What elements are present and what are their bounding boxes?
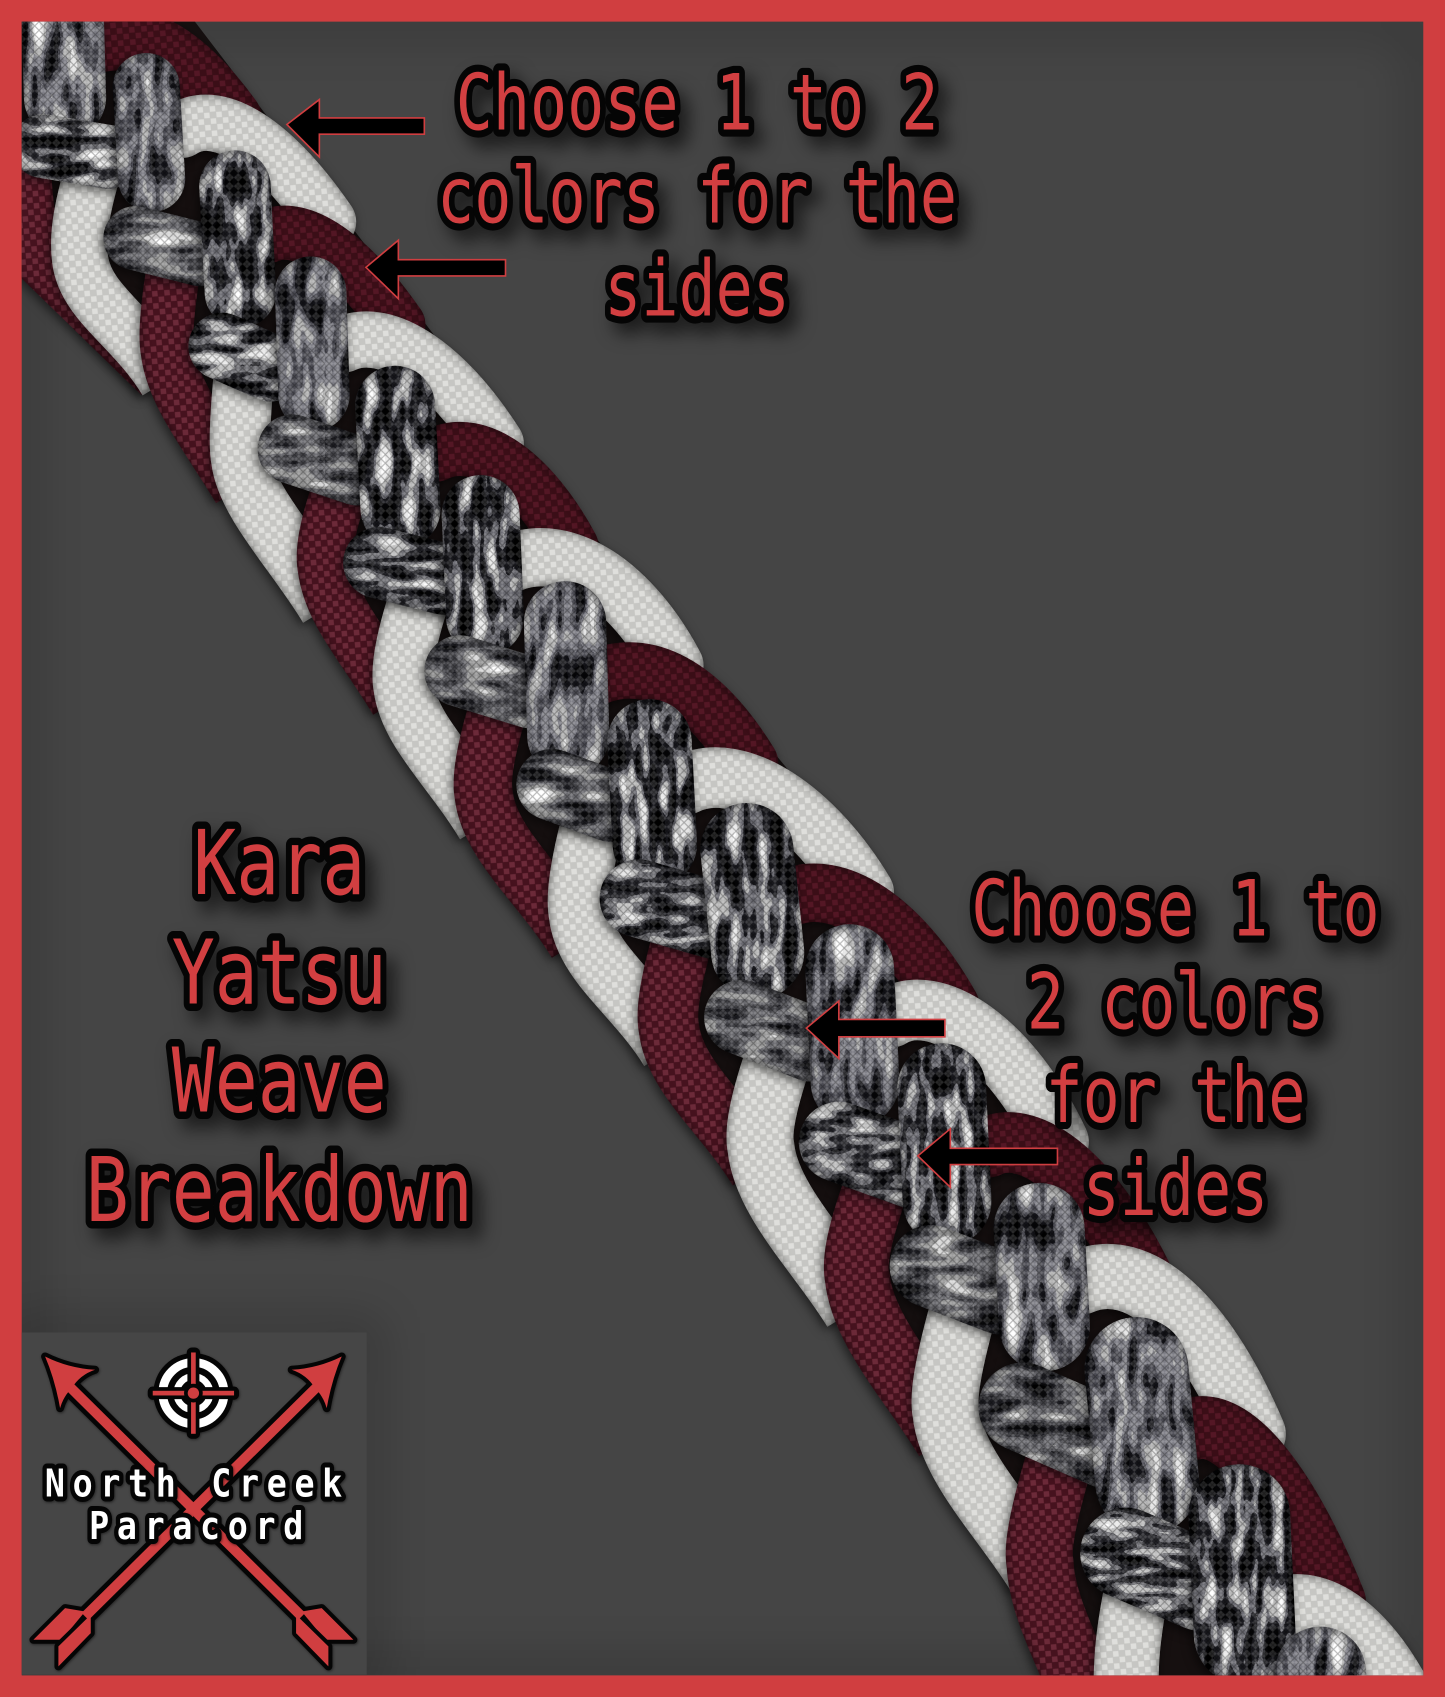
arrow: upper side color two — [366, 240, 506, 299]
logo panel — [22, 1332, 367, 1675]
callout: lower colors for the sides — [971, 865, 1380, 1234]
callout: top colors for the sides: colors for the — [437, 152, 957, 241]
arrow: upper side color one — [287, 100, 424, 157]
arrow: center cord color one — [806, 1001, 945, 1058]
callout: lower colors for the sides: Choose 1 to — [971, 865, 1380, 954]
arrow: center cord color two — [918, 1129, 1057, 1187]
title: Kara Yatsu Weave Breakdown — [86, 812, 473, 1243]
logo wordmark: Paracord — [89, 1505, 311, 1549]
callout: top colors for the sides — [437, 59, 957, 334]
logo: North Creek Paracord — [22, 1332, 367, 1675]
callout: lower colors for the sides: sides — [1083, 1144, 1268, 1234]
title: Kara Yatsu Weave Breakdown: Weave — [172, 1030, 387, 1134]
callout: lower colors for the sides: for the — [1045, 1051, 1305, 1141]
callout: top colors for the sides: sides — [604, 245, 790, 334]
lower side cords: white and maroon — [24, 152, 1136, 1697]
logo wordmark — [45, 1462, 350, 1549]
title: Kara Yatsu Weave Breakdown: Breakdown — [86, 1139, 473, 1243]
logo wordmark: North Creek — [45, 1462, 350, 1506]
title: Kara Yatsu Weave Breakdown: Kara — [193, 812, 365, 916]
target crosshair icon — [148, 1347, 239, 1439]
callout: top colors for the sides: Choose 1 to 2 — [456, 59, 938, 148]
crossed arrows — [33, 1356, 353, 1666]
callout: lower colors for the sides: 2 colors — [1027, 958, 1324, 1047]
title: Kara Yatsu Weave Breakdown: Yatsu — [172, 922, 387, 1025]
